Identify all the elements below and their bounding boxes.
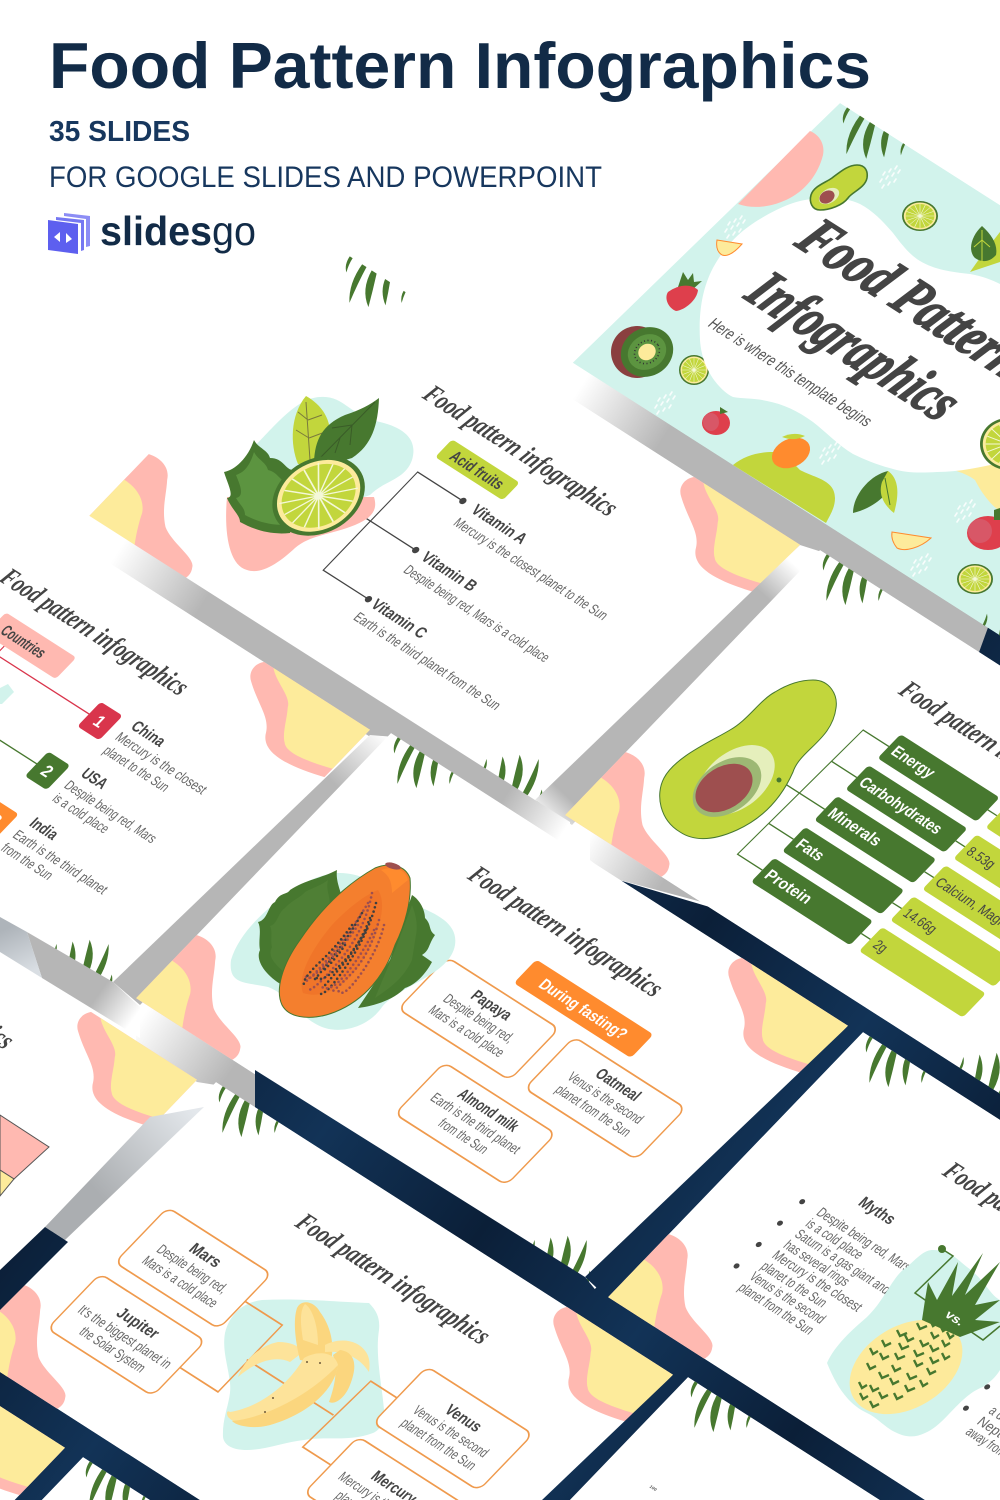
panel: lower left slide xyxy=(0,1153,70,1500)
card: almond milk: Almond milk xyxy=(453,1086,523,1135)
text block: myths xyxy=(734,1196,910,1335)
panel: cover slide xyxy=(572,103,1000,667)
row: fats xyxy=(782,827,1000,987)
icon: apple upper xyxy=(702,407,730,435)
illustration: pineapple xyxy=(827,1245,1000,1436)
row: fats: 14.66g xyxy=(900,906,941,936)
text block: vitamin C: Earth is the third planet from the Sun xyxy=(350,610,504,713)
logo: slidesgo xyxy=(48,208,256,254)
text block: China xyxy=(100,722,207,795)
illustration: papaya xyxy=(231,861,455,1030)
illustration: banana backdrop xyxy=(223,1299,384,1450)
text block: myths: has several rings xyxy=(780,1238,853,1289)
text block: USA xyxy=(52,768,156,843)
icon: avocado xyxy=(810,165,867,210)
header: subtitle: FOR GOOGLE SLIDES AND POWERPOINT xyxy=(49,161,602,194)
marker 3 xyxy=(0,802,18,834)
grey shadow bands along the countries slide xyxy=(0,735,395,1038)
panel: countries slide xyxy=(0,568,370,982)
logo wordmark: slidesgo xyxy=(100,208,256,254)
marker 2 xyxy=(26,752,69,789)
text block: USA: Despite being red, Mars xyxy=(61,778,160,846)
grey and navy band beside the pyramid chart slide xyxy=(0,1107,204,1310)
bracket lines xyxy=(736,729,890,870)
heading: Food pattern infographics xyxy=(461,860,671,1003)
pill: during fasting xyxy=(514,959,653,1058)
card: oatmeal xyxy=(525,1037,686,1160)
text block: USA: is a cold place xyxy=(49,791,113,836)
text block: vitamin B: Despite being red, Mars is a cold place xyxy=(400,562,554,665)
row: protein: Protein xyxy=(760,867,816,908)
card: papaya: Mars is a cold place xyxy=(425,1002,508,1060)
illustration: banana xyxy=(227,1302,370,1427)
icon: mango xyxy=(767,432,815,474)
navy bands along the papaya slide xyxy=(255,1026,870,1320)
text block: myths: Despite being red, Mars xyxy=(813,1205,915,1275)
heading: Food pattern infographics xyxy=(0,562,196,701)
illustration: avocado xyxy=(660,680,836,839)
card: mars: Mars xyxy=(185,1240,226,1271)
connector lines xyxy=(0,646,90,764)
card: almond milk: Earth is the third planet xyxy=(427,1090,524,1157)
card: oatmeal: Oatmeal xyxy=(591,1066,644,1105)
icon: apple lower xyxy=(967,508,1000,550)
text block: myths: is a cold place xyxy=(802,1216,867,1262)
text block: myths: Myths xyxy=(854,1194,900,1228)
text block: vitamin B: Vitamin B xyxy=(417,549,481,595)
illustration: pineapple: vs. xyxy=(942,1308,968,1328)
icon: leaf pair xyxy=(853,471,897,513)
panel: avocado slide xyxy=(560,548,1000,1110)
text block: China: planet to the Sun xyxy=(100,743,173,794)
text block: myths: Saturn is a gas giant and xyxy=(792,1227,894,1297)
text block: India: Earth is the third planet xyxy=(10,827,111,897)
row: carbohydrates: Carbohydrates xyxy=(855,774,946,838)
marker 1 xyxy=(78,703,121,739)
icon: lime at right edge xyxy=(980,418,1000,470)
card: jupiter: Jupiter xyxy=(112,1305,163,1342)
panel: bottom slide with page number xyxy=(570,1377,880,1500)
page number: 100 xyxy=(648,1484,659,1492)
row: minerals: Minerals xyxy=(824,805,886,850)
pill: acid fruits: Acid fruits xyxy=(445,448,508,493)
connector lines xyxy=(179,1300,397,1466)
text block: USA: USA xyxy=(77,765,112,793)
header: slide count: 35 SLIDES xyxy=(49,116,190,148)
heading: Food pattern infographics xyxy=(288,1207,498,1350)
text block: myths: planet to the Sun xyxy=(758,1259,831,1310)
card: mercury xyxy=(304,1437,464,1500)
decorative pink and lime blobs xyxy=(733,131,1000,523)
text block: vitamin A: Vitamin A xyxy=(467,502,531,548)
card: venus: Venus is the second xyxy=(409,1403,492,1460)
white centre shape xyxy=(700,198,1000,473)
map fragment xyxy=(0,684,14,704)
card: mars: Despite being red, xyxy=(153,1242,231,1296)
icon: stacked slides xyxy=(48,213,90,254)
pill: during fasting: During fasting? xyxy=(534,976,631,1043)
card: venus: planet from the Sun xyxy=(397,1415,480,1473)
slide gaps: base grey and navy bands behind the slides xyxy=(0,340,1000,1500)
text block: vitamin C: Vitamin C xyxy=(367,596,431,642)
text block: vitamin C xyxy=(353,598,500,710)
card: oatmeal: planet from the Sun xyxy=(552,1082,635,1140)
panel: banana slide xyxy=(0,1078,678,1500)
card: papaya: Despite being red, xyxy=(440,991,518,1046)
panel: lime slide xyxy=(83,248,805,814)
card: papaya: Papaya xyxy=(467,987,516,1024)
panel: pineapple slide xyxy=(603,1030,1000,1500)
grey shadow bands along the lime slide xyxy=(88,515,822,862)
cover subtitle: Here is where this template begins xyxy=(704,315,877,430)
row: carbohydrates xyxy=(847,766,1000,888)
pill: countries xyxy=(0,612,76,679)
icon: apple slice lower xyxy=(892,532,931,550)
card: venus xyxy=(373,1366,533,1491)
header: main title: Food Pattern Infographics xyxy=(49,29,871,102)
icon: apple slice upper xyxy=(717,240,742,255)
icon: lime slices xyxy=(679,201,993,594)
illustration: lime and leaves xyxy=(224,396,413,571)
card: almond milk: from the Sun xyxy=(435,1116,492,1157)
card: venus: Venus xyxy=(440,1402,486,1436)
marker 2: 2 xyxy=(36,762,58,781)
card: papaya xyxy=(398,957,559,1080)
text block: myths: Mercury is the closest xyxy=(769,1248,866,1315)
row: energy: Energy xyxy=(887,743,939,782)
text block: myths: planet from the Sun xyxy=(735,1280,818,1337)
card: jupiter: It's the biggest planet in xyxy=(74,1302,175,1371)
text block: vitamin B xyxy=(403,550,548,662)
icon: kiwi xyxy=(611,317,683,387)
row: protein xyxy=(751,858,986,1018)
card: oatmeal: Venus is the second xyxy=(564,1069,647,1127)
text block: China: China xyxy=(127,718,169,750)
heading: Food pattern infographics xyxy=(416,379,625,522)
row: protein: 2g xyxy=(870,937,891,956)
card: mars: Mars is a cold place xyxy=(139,1253,222,1311)
small white tick marks xyxy=(655,166,975,576)
text block: India xyxy=(0,817,108,895)
navy band along the banana slide xyxy=(542,1375,690,1500)
panel: papaya slide xyxy=(131,729,853,1295)
icon: strawberry xyxy=(666,272,702,311)
marker 1: 1 xyxy=(89,712,110,731)
row: fats: Fats xyxy=(791,836,828,865)
card: jupiter: the Solar System xyxy=(76,1324,149,1375)
text block: India: India xyxy=(25,815,62,844)
panel: pyramid chart slide xyxy=(0,1012,197,1270)
connector lines xyxy=(322,471,466,602)
card: almond milk xyxy=(395,1062,556,1185)
row: energy xyxy=(879,736,1000,837)
text block: vitamin A xyxy=(453,504,607,620)
row: carbohydrates: 8.53g xyxy=(963,844,999,872)
icon: leaf top right xyxy=(970,226,1000,272)
card: mars xyxy=(115,1207,272,1329)
row: minerals xyxy=(816,797,1000,940)
text block: facts xyxy=(962,1384,1000,1456)
panel: bottom left slide xyxy=(42,1457,150,1500)
text block: myths: Venus is the second xyxy=(746,1269,829,1326)
chart fragment xyxy=(0,1115,49,1196)
text block: vitamin A: Mercury is the closest planet to the Sun xyxy=(450,515,612,623)
card: jupiter xyxy=(47,1274,205,1396)
text block: China: Mercury is the closest xyxy=(112,730,211,797)
